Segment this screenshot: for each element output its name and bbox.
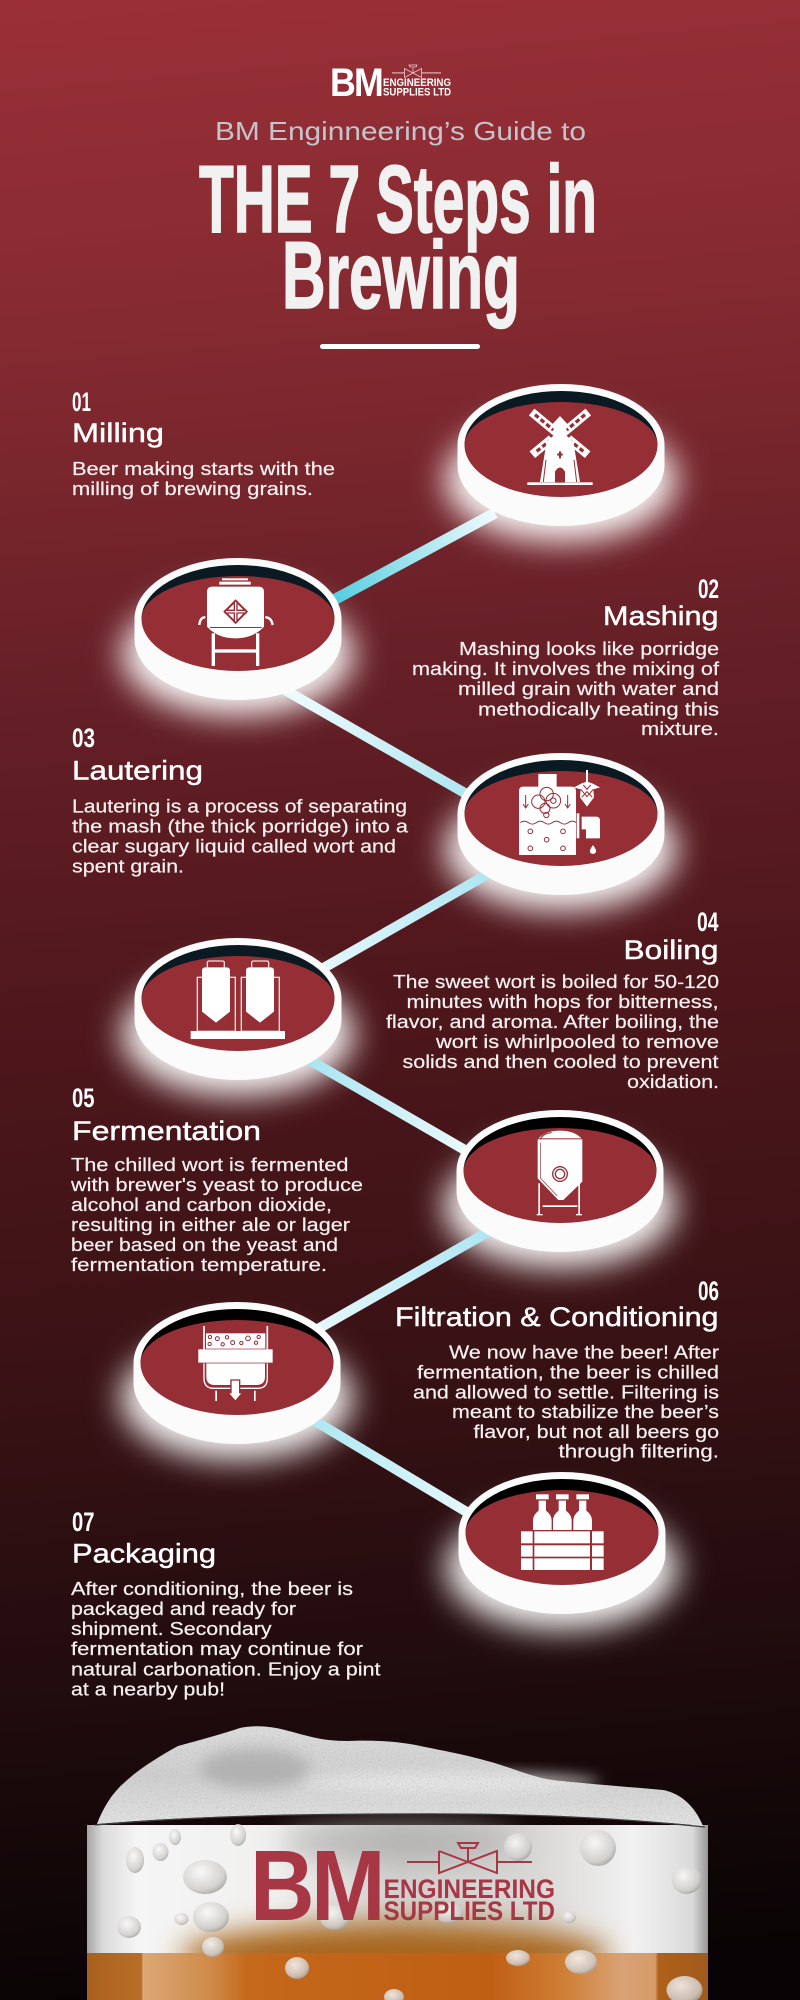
step 7 text: shipment. Secondary <box>71 1619 272 1639</box>
step 6 text: flavor, but not all beers go <box>474 1422 719 1442</box>
logo: top <box>330 61 451 105</box>
step 2 text: milled grain with water and <box>458 679 719 699</box>
step 4 text: solids and then cooled to prevent <box>402 1052 718 1072</box>
step 3 text: 03 <box>72 723 95 753</box>
step 6 text: fermentation, the beer is chilled <box>417 1362 719 1382</box>
connector 5 to 6 <box>316 1232 488 1330</box>
step 3 text <box>72 723 409 876</box>
step 7 text: Packaging <box>72 1538 216 1568</box>
step 5 disk: fermentation <box>456 1110 664 1252</box>
glass head band <box>87 1825 708 1955</box>
beer <box>87 1953 708 2000</box>
step 4 text <box>386 907 719 1092</box>
step 2 text <box>412 574 720 739</box>
step 4 text: minutes with hops for bitterness, <box>406 992 718 1012</box>
step 1 text: Beer making starts with the <box>72 459 335 479</box>
step 4 text: The sweet wort is boiled for 50-120 <box>393 972 719 992</box>
step 5 text: alcohol and carbon dioxide, <box>71 1195 332 1215</box>
connector 6 to 7 <box>310 1418 470 1514</box>
logo on glass <box>250 1830 555 1942</box>
step 1 text: 01 <box>72 387 91 417</box>
icon: windmill <box>527 412 593 485</box>
step 4 text: oxidation. <box>627 1072 719 1092</box>
step 1 text: Milling <box>72 418 164 448</box>
step 5 text: Fermentation <box>72 1116 261 1146</box>
step 2 text: mixture. <box>641 719 719 739</box>
connector 3 to 4 <box>320 874 488 970</box>
step 6 text: 06 <box>698 1276 719 1306</box>
step 3 text: spent grain. <box>72 856 184 876</box>
step 7 text: at a nearby pub! <box>71 1680 225 1700</box>
title: Brewing <box>282 222 520 329</box>
logo: top: ENGINEERING <box>383 77 451 89</box>
step 6 disk: filtration <box>134 1302 340 1444</box>
step 7 text: fermentation may continue for <box>71 1639 363 1659</box>
logo: top: BM <box>330 61 382 105</box>
icon: beer crate <box>521 1494 604 1570</box>
step 5 text: fermentation temperature. <box>71 1255 327 1275</box>
step 5 text: beer based on the yeast and <box>71 1235 338 1255</box>
step 5 text: resulting in either ale or lager <box>71 1215 350 1235</box>
connector 1 to 2 <box>330 513 495 602</box>
subtitle: BM Enginneering’s Guide to <box>215 116 586 146</box>
step 1 text: milling of brewing grains. <box>72 479 313 499</box>
step 5 text: The chilled wort is fermented <box>71 1155 348 1175</box>
step 4 disk: boiling <box>134 938 342 1080</box>
logo on glass: BM <box>250 1830 382 1942</box>
step 6 text: Filtration & Conditioning <box>395 1302 718 1332</box>
step 4 text: flavor, and aroma. After boiling, the <box>386 1012 719 1032</box>
disk glows <box>121 418 678 1630</box>
step 2 text: Mashing looks like porridge <box>459 639 719 659</box>
beer glass illustration <box>87 1726 708 2000</box>
icon: twin boil kettles <box>191 961 285 1039</box>
step 2 text: 02 <box>698 574 719 604</box>
logo on glass: SUPPLIES LTD <box>384 1896 555 1926</box>
step 5 text: with brewer's yeast to produce <box>70 1175 363 1195</box>
title <box>199 146 597 329</box>
step 6 text: We now have the beer! After <box>449 1342 719 1362</box>
step 2 disk: mashing <box>134 558 342 700</box>
step 3 text: clear sugary liquid called wort and <box>72 836 396 856</box>
step 3 disk: lautering <box>458 753 664 895</box>
step 4 text: Boiling <box>624 935 718 965</box>
connector 4 to 5 <box>306 1058 470 1153</box>
step 7 disk: packaging <box>458 1472 666 1614</box>
condensation drops <box>117 1824 702 2000</box>
step 6 text: meant to stabilize the beer’s <box>452 1402 719 1422</box>
step 7 text: packaged and ready for <box>71 1599 296 1619</box>
step 2 text: methodically heating this <box>478 700 719 720</box>
icon: mash tun <box>199 578 273 666</box>
step 7 text <box>71 1507 380 1700</box>
connector 2 to 3 <box>285 690 470 796</box>
step 6 text: through filtering. <box>558 1442 719 1462</box>
step 7 text: natural carbonation. Enjoy a pint <box>71 1660 380 1680</box>
icon: conical fermenter <box>537 1131 582 1215</box>
icon: filter vessel <box>198 1326 273 1401</box>
step 5 text <box>70 1083 363 1275</box>
step 4 text: 04 <box>697 907 718 937</box>
step 7 text: After conditioning, the beer is <box>71 1579 353 1599</box>
shading on glass <box>180 1822 610 1987</box>
foam <box>95 1726 705 1827</box>
step 3 text: Lautering <box>72 756 203 786</box>
step 5 text: 05 <box>72 1083 94 1113</box>
title divider <box>320 344 480 349</box>
logo: top: SUPPLIES LTD <box>383 87 451 99</box>
step 3 text: the mash (the thick porridge) into a <box>72 816 409 836</box>
step 1 disk: milling <box>458 384 664 526</box>
step 4 text: wort is whirlpooled to remove <box>435 1032 719 1052</box>
step 6 text <box>395 1276 719 1462</box>
icon: lauter tun with hops <box>519 770 600 855</box>
step 6 text: and allowed to settle. Filtering is <box>413 1382 719 1402</box>
step 7 text: 07 <box>72 1507 94 1537</box>
step 2 text: making. It involves the mixing of <box>412 659 720 679</box>
step 1 text <box>72 387 335 499</box>
step 3 text: Lautering is a process of separating <box>72 796 407 816</box>
step 2 text: Mashing <box>603 601 718 631</box>
logo on glass: ENGINEERING <box>384 1874 555 1904</box>
